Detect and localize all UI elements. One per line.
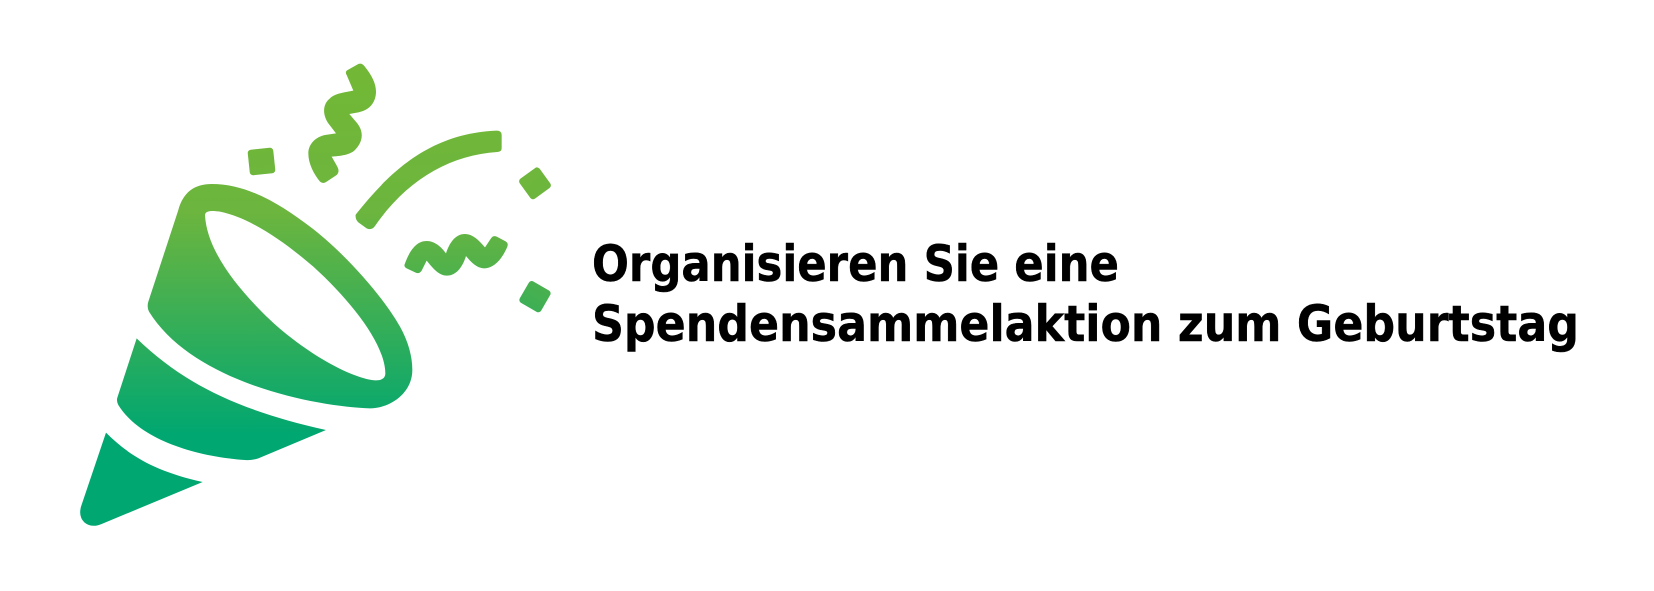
confetti: square upper right xyxy=(518,166,552,201)
confetti: long arc xyxy=(355,131,502,229)
popper cone tip xyxy=(80,433,203,526)
icon: party popper xyxy=(80,64,552,526)
heading line 1: Organisieren Sie eine xyxy=(592,235,1119,293)
confetti: top squiggle xyxy=(308,64,376,183)
confetti: square left xyxy=(247,147,276,176)
confetti: small wiggle xyxy=(404,234,508,276)
confetti: square lower right xyxy=(518,280,552,314)
heading xyxy=(592,235,1579,353)
popper cone top with opening xyxy=(148,184,412,408)
popper cone middle band xyxy=(117,338,326,460)
